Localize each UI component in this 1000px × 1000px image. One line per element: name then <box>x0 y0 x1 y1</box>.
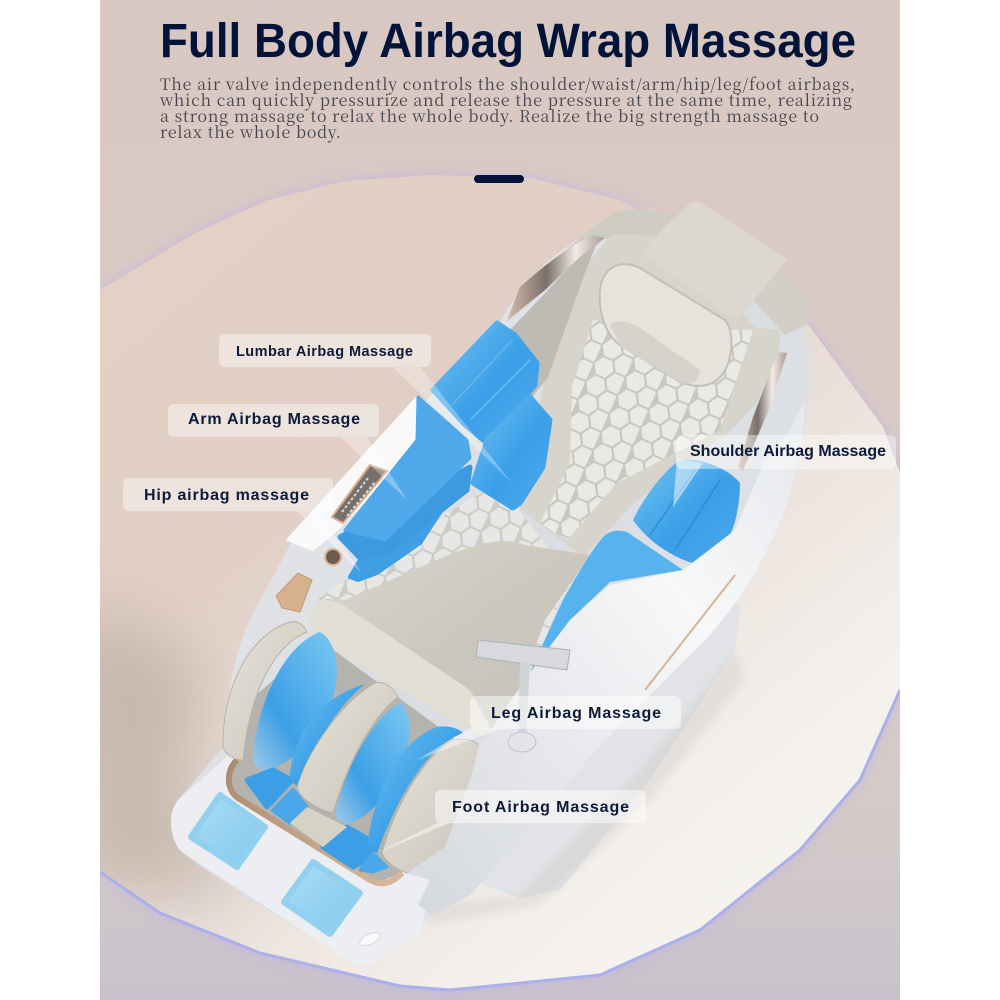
outer shell <box>170 209 809 964</box>
gold trim <box>229 760 402 883</box>
tablet holder <box>476 640 570 752</box>
callout: arm airbag <box>168 404 407 500</box>
massage chair <box>170 203 810 966</box>
hexagon mesh back <box>540 320 753 540</box>
leg shield right cap <box>407 745 483 880</box>
callout: foot airbag <box>377 790 646 853</box>
callout: lumbar airbag: Lumbar Airbag Massage <box>236 344 413 360</box>
footrest <box>172 752 432 966</box>
leg shield right <box>382 739 482 873</box>
side panel gold line <box>645 575 735 690</box>
description text: relax the whole body. <box>160 120 341 143</box>
calf airbag middle left <box>290 684 365 787</box>
leg shield middle <box>297 682 398 813</box>
chrome trim right <box>738 352 787 470</box>
seat front roll <box>305 600 500 745</box>
lower leg well <box>228 640 470 883</box>
leg shield left <box>223 622 307 760</box>
left inner wing <box>510 235 600 400</box>
calf airbag left <box>253 632 337 770</box>
console knob <box>325 549 341 565</box>
background panel <box>100 0 900 1000</box>
leg strip airbag <box>530 531 683 672</box>
chair shadow <box>420 650 745 925</box>
description text <box>159 72 855 143</box>
seat cushion <box>305 541 590 745</box>
description text: which can quickly pressurize and release the pressure at the same time, realizing <box>159 88 852 111</box>
callout: arm airbag: Arm Airbag Massage <box>188 411 360 428</box>
chrome trim left <box>507 235 605 320</box>
side panel <box>418 400 805 915</box>
title: Full Body Airbag Wrap Massage <box>160 15 856 68</box>
top ribbon right <box>755 267 810 333</box>
hip airbag <box>350 493 453 580</box>
platform disc <box>70 175 925 990</box>
footrest ellipse button <box>358 930 382 948</box>
callout: hip airbag <box>123 478 362 573</box>
foot airbag pad left <box>191 795 265 867</box>
arm airbag <box>345 397 470 540</box>
callout: shoulder airbag: Shoulder Airbag Massage <box>690 443 886 460</box>
gold console slot <box>276 573 312 612</box>
callout: shoulder airbag <box>673 435 896 507</box>
pillow inner cushion <box>610 321 700 384</box>
control panel <box>332 465 387 523</box>
accent bar <box>474 175 524 183</box>
control armrest white <box>287 397 418 550</box>
lower foot airbags <box>247 770 387 872</box>
calf airbag middle right <box>335 703 410 823</box>
chair base <box>470 590 740 898</box>
head pillow <box>600 264 731 386</box>
shoulder airbag <box>633 460 740 563</box>
backrest frame <box>523 237 777 553</box>
hexagon mesh seat <box>315 492 590 700</box>
callout: foot airbag: Foot Airbag Massage <box>452 799 629 816</box>
head flap <box>643 203 785 318</box>
foot airbag pad right <box>284 862 360 934</box>
calf airbag right <box>368 726 463 853</box>
lumbar airbag <box>433 323 537 440</box>
description text: a strong massage to relax the whole body. Realize the big strength massage to <box>160 104 819 127</box>
callout: hip airbag: Hip airbag massage <box>144 487 309 504</box>
shell rim <box>507 209 672 322</box>
callout: lumbar airbag <box>219 334 512 483</box>
callout: leg airbag <box>417 696 681 760</box>
lower arm airbag <box>340 467 470 558</box>
lower side console <box>247 547 327 640</box>
description text: The air valve independently controls the shoulder/waist/arm/hip/leg/foot airbags, <box>160 72 855 95</box>
waist airbag <box>473 397 550 508</box>
callout: leg airbag: Leg Airbag Massage <box>491 705 661 722</box>
